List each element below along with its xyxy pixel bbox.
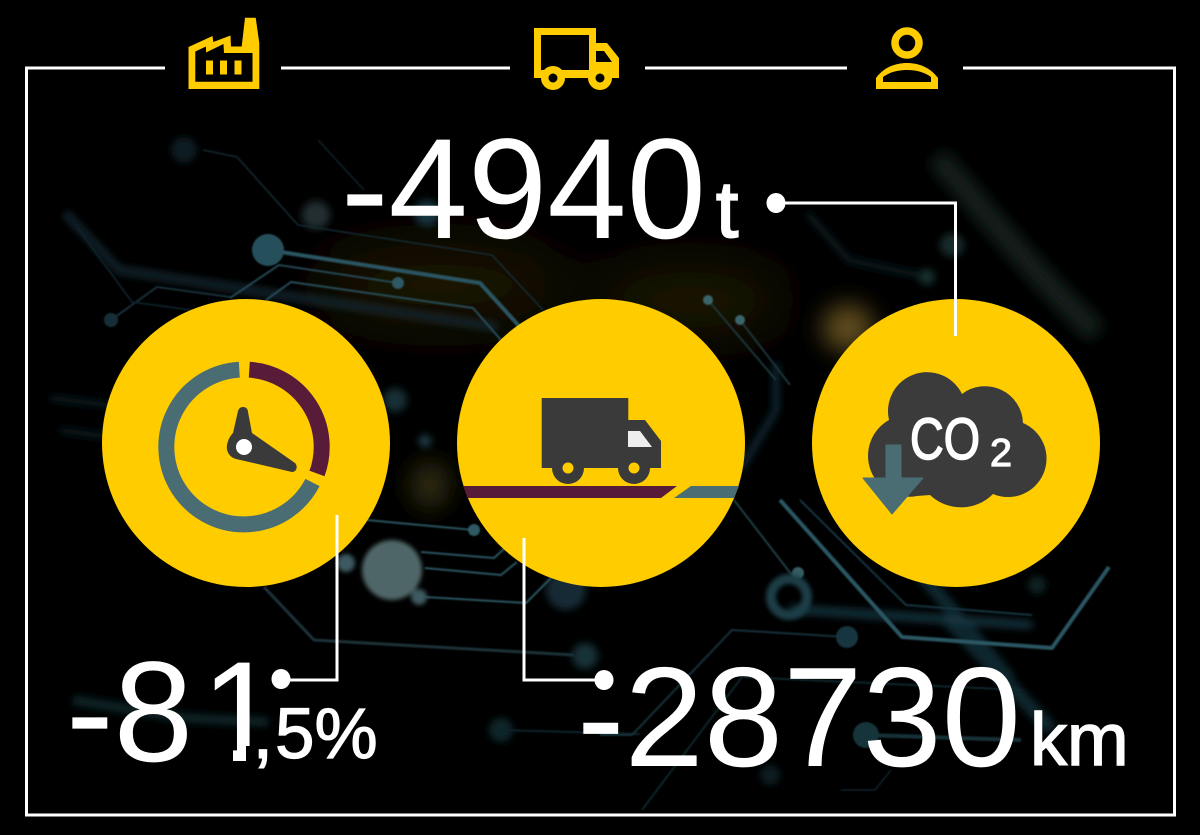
icon: factory windows: [206, 60, 242, 74]
connector: CO2 to -4940 t: [766, 193, 956, 336]
panel: truck circle: [457, 299, 745, 587]
CO2 label: 2: [990, 432, 1012, 475]
icon: person: [876, 31, 938, 89]
stat: -4940 t: -4940: [341, 110, 706, 269]
truck wheels: [552, 452, 650, 484]
icon: factory: [188, 18, 259, 89]
stat: -28730 km: km: [1030, 698, 1129, 781]
stat: -81,5%: ,: [252, 687, 274, 775]
stat: -4940 t: t: [716, 165, 738, 254]
stat: -81,5%: 5%: [275, 695, 378, 774]
CO2 label: CO: [910, 407, 980, 472]
panel: CO2 circle: [812, 299, 1100, 587]
cloud: [868, 372, 1047, 507]
stat: -81,5%: -8: [66, 633, 193, 792]
icon: truck outline: [534, 28, 619, 90]
stat: -81,5%: 1: [201, 633, 281, 792]
clock hands: [227, 407, 297, 472]
arrow down: [863, 445, 923, 514]
truck window: [628, 431, 652, 447]
panel: clock circle: [102, 299, 390, 587]
clock ring: teal share: [166, 370, 312, 524]
truck body: [542, 398, 661, 468]
connector: truck to -28730 km: [524, 538, 614, 690]
stat: -81,5%: [72, 661, 376, 768]
road: teal share: [674, 486, 739, 498]
clock ring: purple share: [249, 370, 322, 474]
road: purple share: [463, 486, 677, 498]
connector: clock to -81,5%: [272, 515, 337, 689]
clock hub: [236, 439, 252, 455]
stat: -28730 km: -28730: [577, 638, 1021, 797]
